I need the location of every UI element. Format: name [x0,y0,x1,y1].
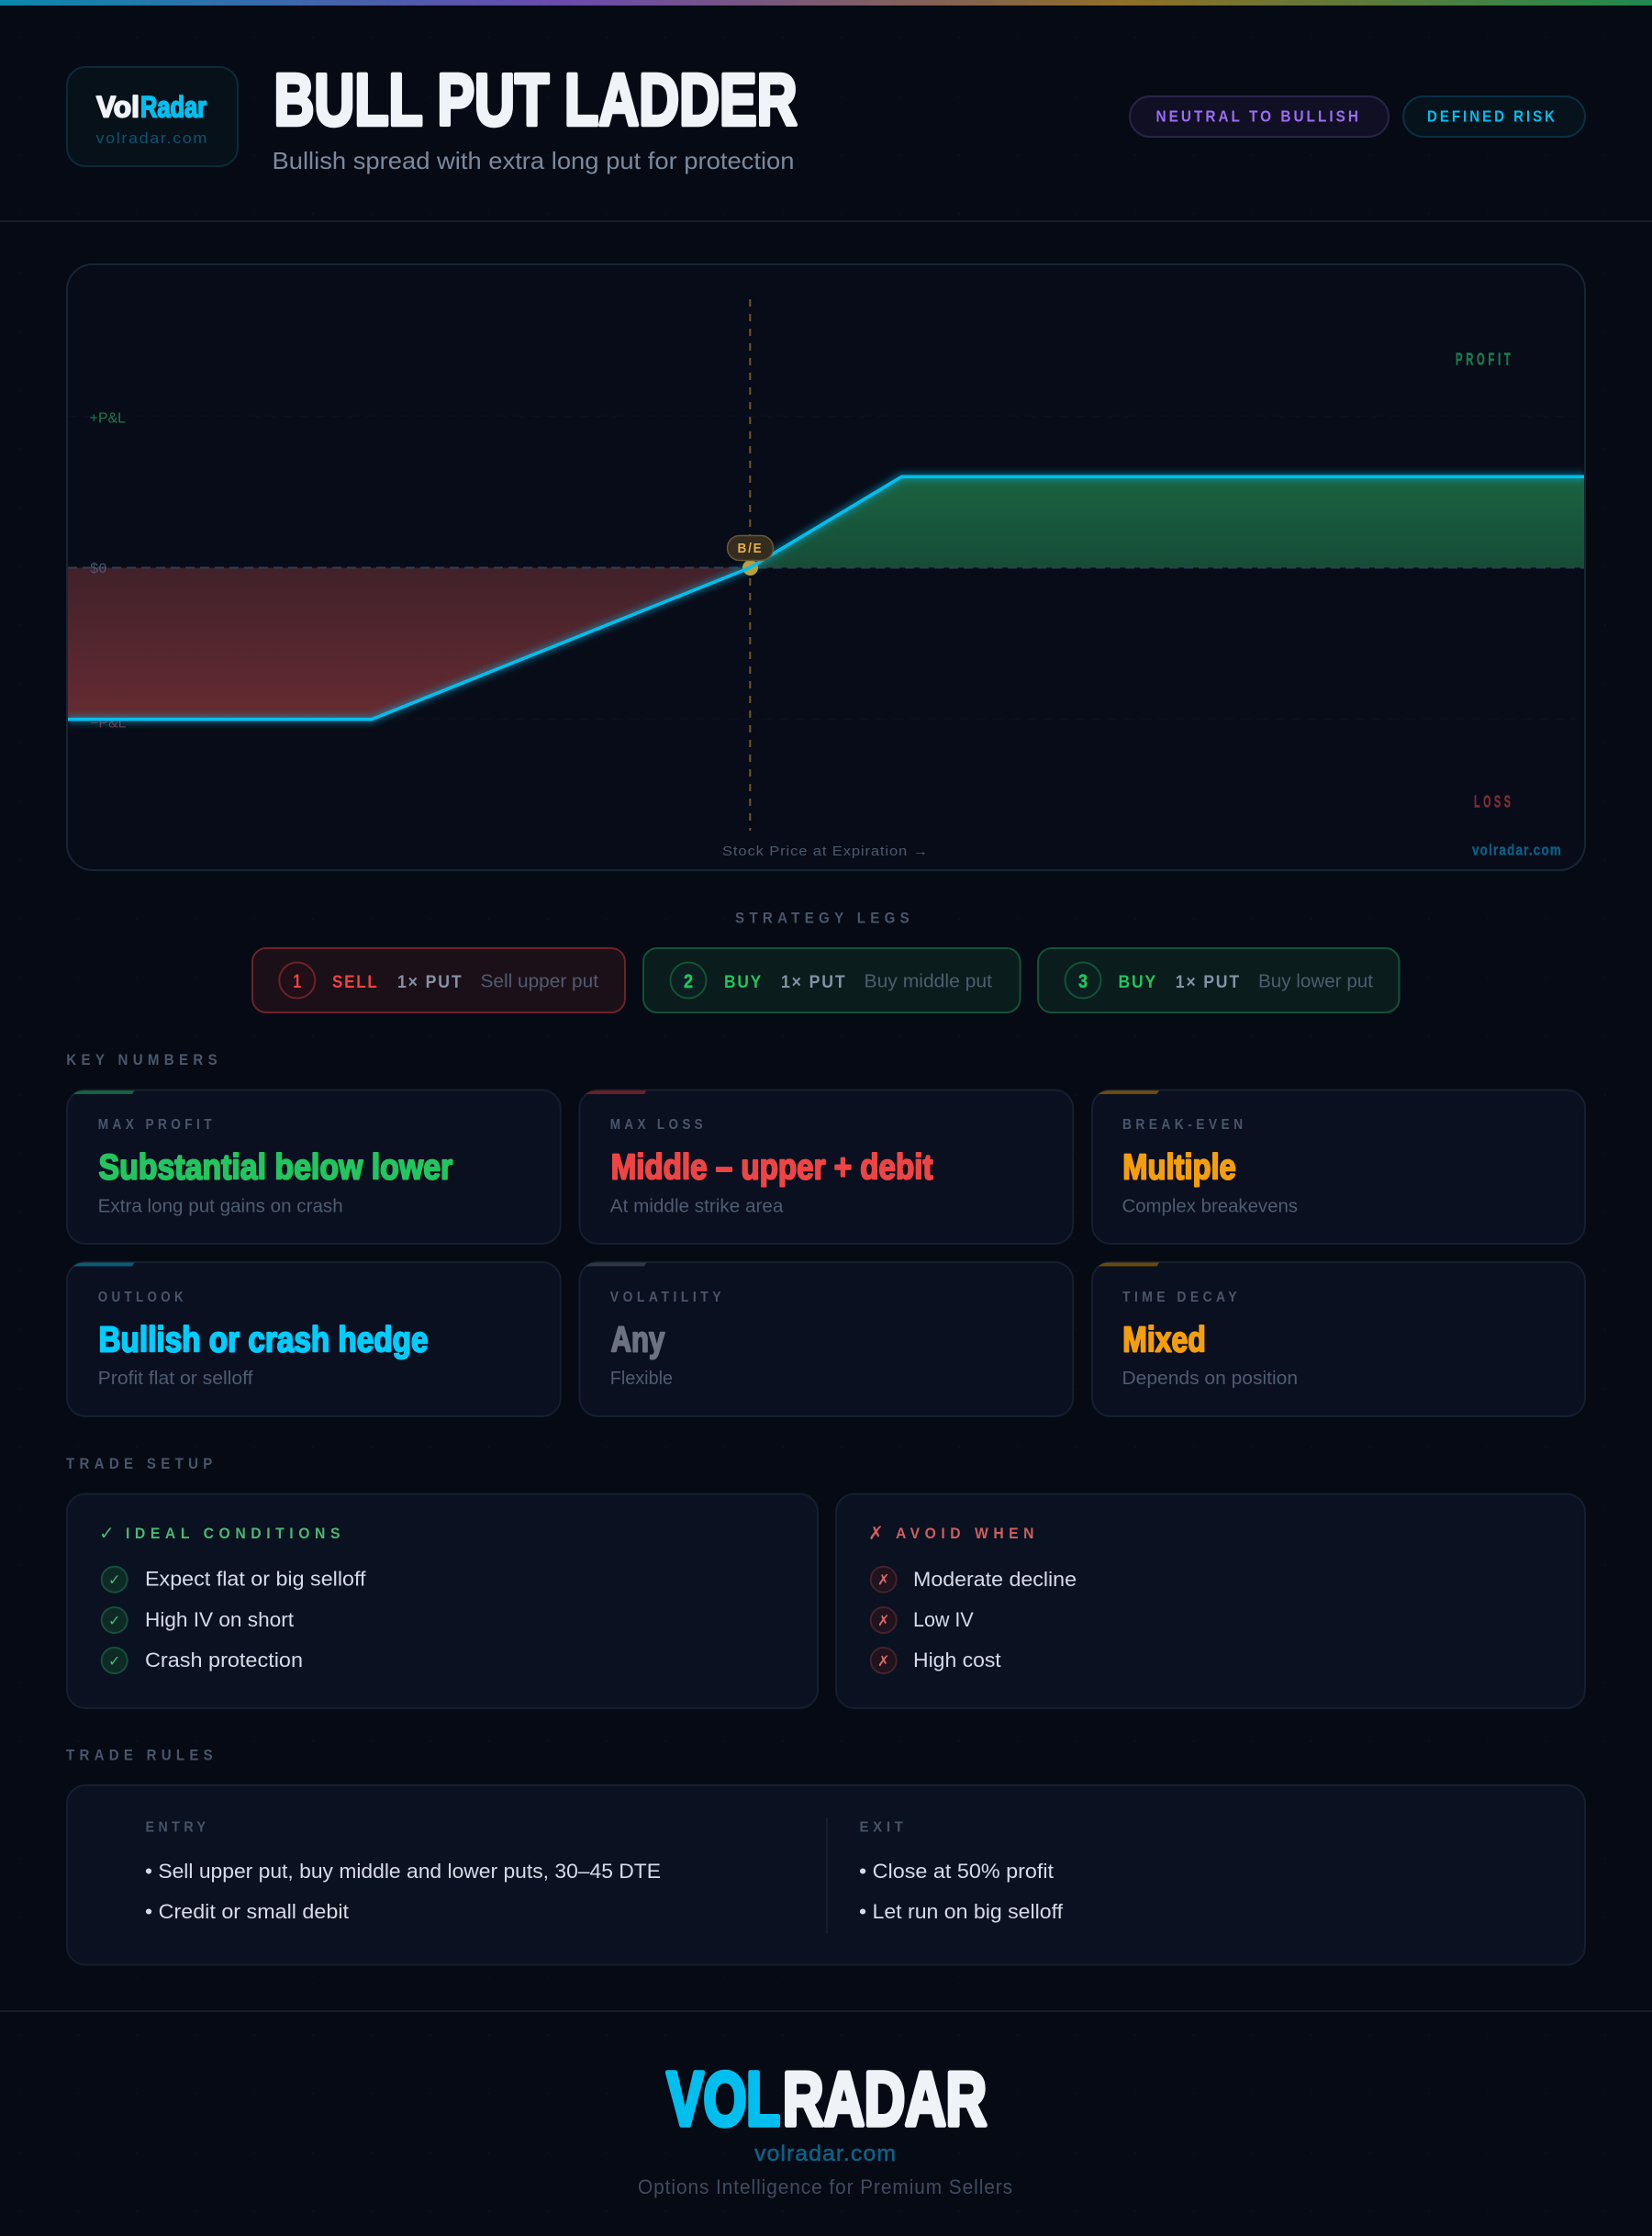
card: break-even: Multiple [1122,1147,1236,1188]
card: outlook: Bullish or crash hedge [99,1320,428,1360]
card: time decay: TIME DECAY [1122,1290,1241,1305]
chart watermark: volradar.com [1472,842,1562,859]
card: time decay: Depends on position [1122,1369,1298,1389]
card: outlook [67,1262,561,1416]
card: max profit: Substantial below lower [99,1147,452,1188]
entry rules: ENTRY [145,1820,209,1836]
item: high iv [102,1607,294,1633]
leg 2 buy: Buy middle put [865,971,992,991]
footer url: volradar.com [754,2141,897,2166]
card: break-even: BREAK-EVEN [1122,1117,1246,1133]
title: BULL PUT LADDER [273,59,797,140]
card: time decay [1092,1262,1585,1416]
leg 1 sell: 1 [293,971,302,992]
footer wordmark [666,2056,987,2141]
break-even vertical line [749,299,751,831]
heading: ideal conditions [99,1522,345,1544]
item: high cost: High cost [913,1649,1001,1671]
card: volatility: VOLATILITY [610,1290,725,1305]
card: break-even: Complex breakevens [1122,1197,1298,1217]
panel: ideal conditions [67,1494,818,1708]
trade setup section [66,1455,1585,1708]
card: volatility: Any [611,1320,664,1360]
card: max profit [67,1090,561,1244]
item: crash protection [102,1648,303,1673]
card: outlook: OUTLOOK [98,1290,187,1305]
profit area [750,476,1584,567]
leg 2 buy: 2 [684,971,693,992]
break-even label: B/E [738,541,764,556]
footer tagline: Options Intelligence for Premium Sellers [638,2175,1013,2198]
card: volatility: Flexible [610,1369,673,1389]
heading: avoid when [868,1522,1039,1544]
exit rules: EXIT [859,1820,907,1836]
card: max profit: MAX PROFIT [98,1117,216,1133]
payoff line glow [68,476,1584,720]
leg 3 buy [1038,948,1399,1012]
card: max loss [580,1090,1073,1244]
item: low iv: Low IV [913,1608,974,1631]
key numbers section [66,1051,1585,1416]
axis label: plus P&L: +P&L [90,411,126,427]
heading: KEY NUMBERS [66,1051,222,1068]
zero line [68,567,1584,569]
top gradient bar [0,0,1652,6]
leg 1 sell: 1× PUT [397,973,463,992]
axis label: zero: $0 [90,561,106,577]
break-even marker [742,560,758,576]
item: low iv: ✗ [877,1612,889,1629]
card: max loss: At middle strike area [610,1197,784,1217]
footer [0,2010,1652,2198]
loss area [68,567,750,720]
strategy legs section [252,910,1399,1012]
leg 1 sell: Sell upper put [481,971,598,991]
panel: rules [67,1785,1585,1964]
card: break-even [1092,1090,1585,1244]
exit rules: • Close at 50% profit [859,1860,1054,1883]
heading: ideal conditions: IDEAL CONDITIONS [126,1525,345,1542]
panel: payoff chart [67,264,1585,870]
entry rules: • Sell upper put, buy middle and lower puts, 30–45 DTE [145,1860,661,1883]
badge: neutral to bullish [1130,96,1389,137]
card: max profit: Extra long put gains on crash [98,1197,343,1217]
exit rules [859,1820,1064,1923]
card: outlook: Profit flat or selloff [98,1369,253,1389]
card: max loss: Middle – upper + debit [611,1147,933,1188]
leg 3 buy: 3 [1078,971,1088,992]
panel: avoid when [836,1494,1585,1708]
exit rules: • Let run on big selloff [859,1900,1064,1923]
header [67,59,1585,174]
leg 2 buy: 1× PUT [781,973,846,992]
item: high iv: ✓ [108,1612,120,1629]
leg 3 buy: Buy lower put [1258,971,1373,991]
leg 2 buy [643,948,1021,1012]
leg 1 sell: SELL [332,973,378,992]
leg 3 buy: BUY [1118,973,1157,992]
footer wordmark: VOL [666,2056,780,2141]
payoff line [68,476,1584,720]
badge: defined risk: DEFINED RISK [1427,106,1557,125]
heading: STRATEGY LEGS [735,910,914,927]
logo badge: volradar.com [95,129,208,147]
loss label: LOSS [1474,793,1514,811]
card: time decay: Mixed [1122,1320,1206,1360]
x-axis caption: Stock Price at Expiration → [722,844,929,859]
profit label: PROFIT [1456,350,1514,368]
logo badge: Radar [140,90,206,123]
entry rules: • Credit or small debit [145,1900,349,1923]
heading: TRADE SETUP [66,1455,218,1472]
axis label: minus P&L: −P&L [90,716,127,732]
badge: neutral to bullish: NEUTRAL TO BULLISH [1156,106,1361,125]
heading: avoid when: AVOID WHEN [896,1525,1039,1542]
heading: ideal conditions: ✓ [99,1522,115,1544]
subtitle: Bullish spread with extra long put for protection [272,147,795,174]
trade rules section [66,1747,1585,1964]
item: crash protection: ✓ [108,1652,120,1670]
item: high cost: ✗ [877,1652,889,1670]
leg 1 sell [252,948,625,1012]
logo badge: Vol [96,90,140,123]
item: flat or selloff: ✓ [108,1571,120,1588]
item: moderate decline: Moderate decline [913,1568,1077,1591]
item: crash protection: Crash protection [145,1649,303,1671]
footer wordmark: RADAR [783,2056,987,2141]
item: flat or selloff: Expect flat or big selloff [145,1568,366,1590]
item: high iv: High IV on short [145,1608,294,1631]
item: low iv [871,1607,974,1633]
leg 2 buy: BUY [724,973,763,992]
heading: TRADE RULES [66,1747,218,1764]
entry rules [145,1820,661,1923]
card: volatility [580,1262,1073,1416]
break-even label [727,536,773,560]
leg 3 buy: 1× PUT [1176,973,1241,992]
item: moderate decline: ✗ [877,1571,889,1588]
item: high cost [871,1648,1001,1673]
item: moderate decline [871,1567,1077,1593]
logo badge [67,67,238,166]
badge: defined risk [1403,96,1585,137]
heading: avoid when: ✗ [868,1522,884,1544]
card: max loss: MAX LOSS [610,1117,707,1133]
